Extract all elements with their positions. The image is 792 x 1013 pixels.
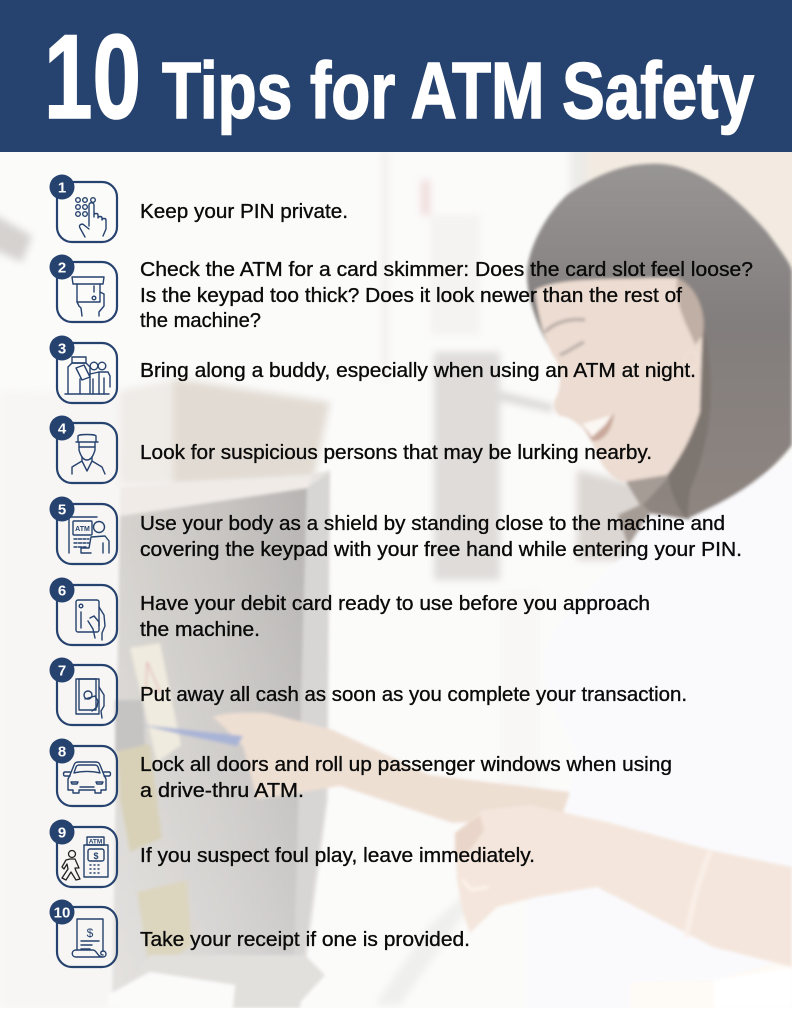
tip 5 icon: shielding the keypad bbox=[50, 496, 117, 564]
tip 6 icon: debit card in hand: 6 bbox=[58, 582, 66, 600]
sticker bbox=[130, 643, 181, 762]
side hair shadow bbox=[668, 320, 711, 519]
tip 10 icon: receipt: $ bbox=[87, 926, 94, 940]
tip 3 icon: ATM with buddy bbox=[50, 336, 117, 403]
tip 2 text bbox=[140, 258, 753, 332]
tip 9 icon: walking away from ATM: $ bbox=[93, 851, 99, 861]
hair bbox=[527, 164, 792, 519]
earring bbox=[684, 351, 698, 369]
tip 8 text bbox=[140, 753, 672, 802]
tip 5 text bbox=[140, 512, 742, 561]
tip 5 icon: shielding the keypad: 5 bbox=[58, 502, 66, 518]
ring bbox=[464, 882, 486, 890]
tip 2 text: the machine? bbox=[140, 309, 261, 332]
tip 8 text: Lock all doors and roll up passenger windows when using bbox=[140, 753, 672, 776]
title banner bbox=[0, 0, 792, 152]
tip 3 icon: ATM with buddy: 3 bbox=[58, 340, 66, 358]
neck shadow bbox=[617, 471, 691, 545]
tip 2 text: Is the keypad too thick? Does it look newer than the rest of bbox=[140, 284, 682, 307]
tip 7 icon: hand with cash bbox=[50, 658, 117, 725]
tip 6 text: Have your debit card ready to use before you approach bbox=[140, 592, 650, 615]
tip 9 icon: walking away from ATM bbox=[50, 820, 117, 887]
tip 7 text: Put away all cash as soon as you complete your transaction. bbox=[140, 683, 687, 706]
tip 10 text: Take your receipt if one is provided. bbox=[140, 928, 470, 951]
ear bbox=[677, 278, 704, 345]
tip 8 icon: car bbox=[50, 738, 117, 806]
second arm bbox=[455, 805, 792, 967]
tip 2 icon: card skimmer bbox=[50, 254, 117, 322]
tip 5 text: Use your body as a shield by standing close to the machine and bbox=[140, 512, 725, 535]
tip 1 icon: keypad: 1 bbox=[58, 180, 66, 196]
smile bbox=[582, 414, 614, 441]
tan panels bbox=[117, 738, 162, 852]
tip 9 text: If you suspect foul play, leave immediately. bbox=[140, 844, 535, 867]
tip 8 text: a drive-thru ATM. bbox=[140, 779, 304, 802]
tip 1 icon: keypad bbox=[50, 174, 117, 242]
shirt bbox=[527, 459, 792, 1008]
tip 6 text: the machine. bbox=[140, 618, 260, 641]
face and neck bbox=[535, 278, 703, 482]
tip 6 icon: debit card in hand bbox=[50, 578, 117, 645]
eye and brow bbox=[545, 320, 585, 355]
tip 10 icon: receipt bbox=[50, 900, 117, 967]
tip 10 icon: receipt: 10 bbox=[54, 904, 70, 922]
tip 1 text: Keep your PIN private. bbox=[140, 200, 348, 223]
tip 5 icon: shielding the keypad: ATM bbox=[75, 526, 90, 533]
bank card bbox=[142, 725, 243, 746]
tip 9 icon: walking away from ATM: 9 bbox=[58, 824, 66, 842]
tip 7 icon: hand with cash: 7 bbox=[58, 662, 66, 680]
tip 6 text bbox=[140, 592, 650, 641]
tip 4 icon: suspicious person: 4 bbox=[58, 420, 67, 438]
tip 8 icon: car: 8 bbox=[58, 744, 66, 760]
tip 9 icon: walking away from ATM: ATM bbox=[89, 838, 102, 846]
ATM body bbox=[297, 470, 330, 1008]
tip 4 text: Look for suspicious persons that may be lurking nearby. bbox=[140, 441, 652, 464]
title: 10: 10 bbox=[44, 10, 141, 144]
tip 5 text: covering the keypad with your free hand while entering your PIN. bbox=[140, 538, 742, 561]
tip 4 icon: suspicious person bbox=[50, 416, 117, 483]
tray and receipt bbox=[147, 954, 325, 1008]
forearm and card hand bbox=[213, 712, 570, 823]
tip 3 text: Bring along a buddy, especially when using an ATM at night. bbox=[140, 359, 696, 382]
tip 2 text: Check the ATM for a card skimmer: Does the card slot feel loose? bbox=[140, 258, 753, 281]
bracelet bbox=[686, 852, 710, 938]
tip 2 icon: card skimmer: 2 bbox=[58, 260, 66, 276]
keypad bbox=[115, 700, 145, 752]
